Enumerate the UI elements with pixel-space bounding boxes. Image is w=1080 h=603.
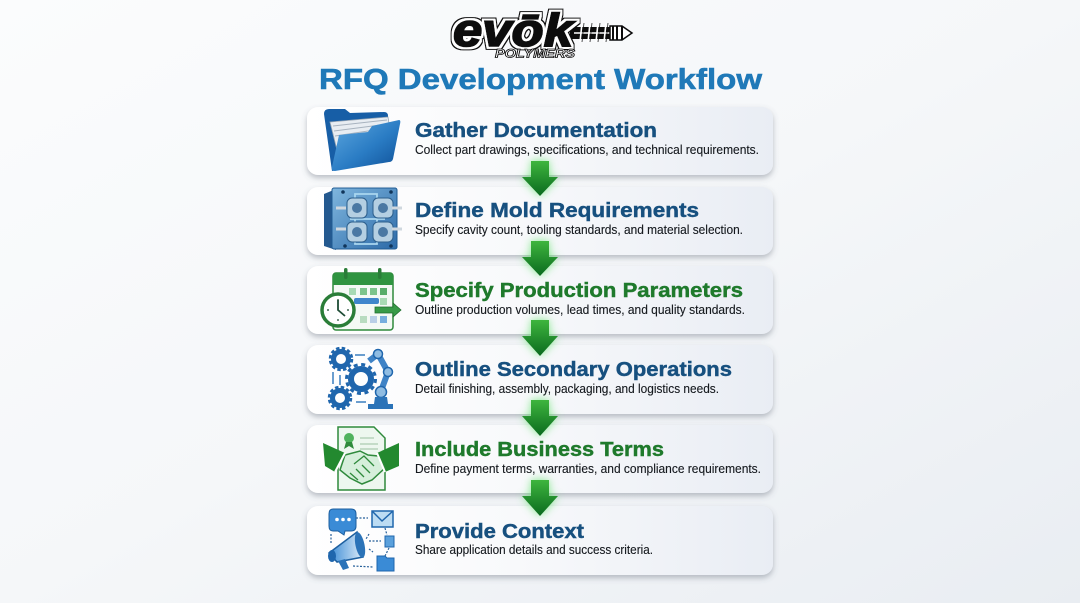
card background [307,266,773,334]
card background [307,506,773,575]
arrow 2 [522,241,558,276]
arrow 3 [522,320,558,356]
heading: Specify Production Parameters [415,279,743,302]
card background [307,345,773,414]
title: RFQ Development Workflow [319,64,763,96]
arrow 5 [522,480,558,516]
icon: mold block [324,188,402,250]
description: Share application details and success criteria. [415,542,653,557]
arrow 4 [522,400,558,436]
logo: evok polymers [453,4,632,60]
icon: folder [324,109,400,171]
heading: Define Mold Requirements [415,199,699,222]
panel: define mold requirements [307,187,773,255]
panel: include business terms [307,425,773,493]
card background [307,187,773,255]
logo sub-brand: POLYMERS [495,46,575,60]
icon: megaphone and messages [328,509,394,571]
panel: specify production parameters [307,266,773,334]
logo wordmark: evōk [453,4,576,56]
description: Specify cavity count, tooling standards, and material selection. [415,222,743,237]
panel: gather documentation [307,107,773,175]
description: Outline production volumes, lead times, and quality standards. [415,302,745,317]
arrow 1 [522,161,558,196]
panel: outline secondary operations [307,345,773,414]
description: Collect part drawings, specifications, and technical requirements. [415,142,759,157]
logo screw and bullet [570,23,632,42]
heading: Provide Context [415,520,584,543]
icon: gears and robot arm [329,348,393,409]
card background [307,107,773,175]
heading: Outline Secondary Operations [415,358,732,381]
panel: provide context [307,506,773,575]
description: Detail finishing, assembly, packaging, and logistics needs. [415,381,719,396]
heading: Gather Documentation [415,119,657,142]
icon: contract and handshake [323,427,399,490]
card background [307,425,773,493]
description: Define payment terms, warranties, and compliance requirements. [415,461,761,476]
icon: calendar and clock [322,268,401,330]
heading: Include Business Terms [415,438,664,461]
